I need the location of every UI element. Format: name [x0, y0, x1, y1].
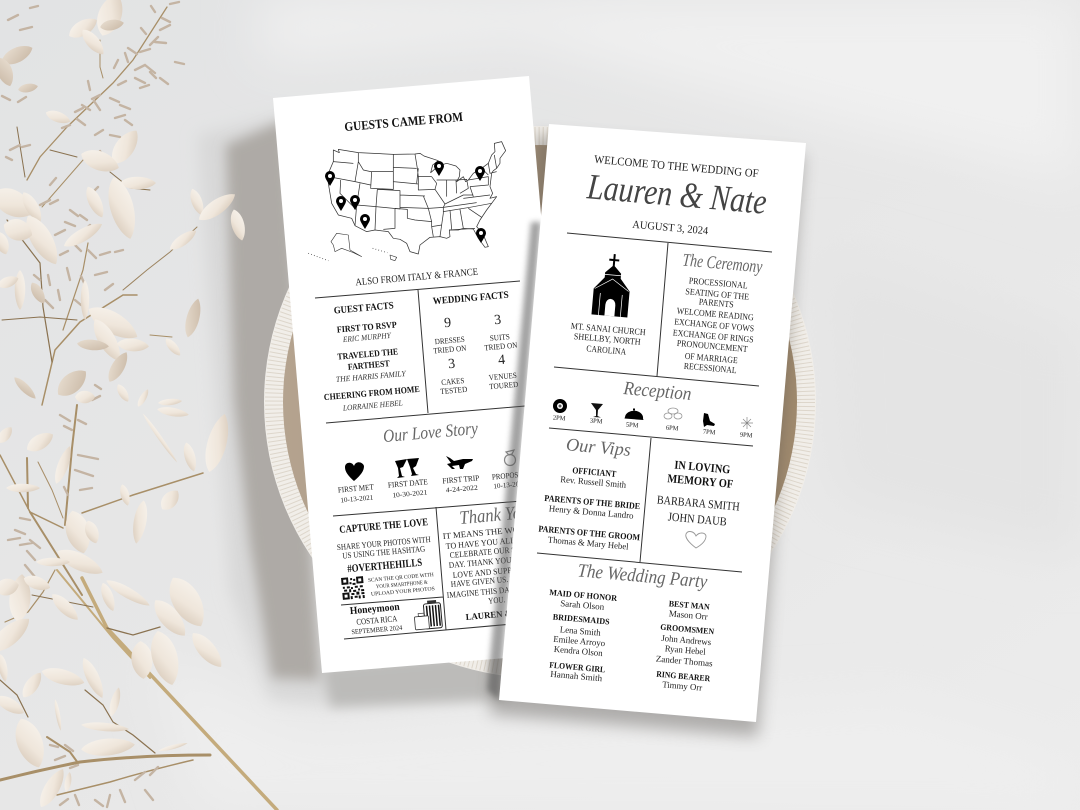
panel: the wedding party: MAID OF HONOR [549, 587, 618, 603]
panel: honeymoon [349, 600, 442, 636]
panel: honeymoon: COSTA RICA [356, 613, 398, 627]
icon: heart [345, 462, 364, 481]
icon: luggage [413, 600, 442, 630]
panel: in loving memory: IN LOVING [674, 458, 731, 476]
panel: guest facts: THE HARRIS FAMILY [336, 369, 408, 384]
panel: the wedding party: Zander Thomas [655, 654, 714, 669]
icon: bells [703, 413, 715, 427]
plant: dried branches and leaves [0, 0, 277, 810]
panel: our VIPs: Our Vips [565, 434, 632, 460]
panel: reception timeline [553, 378, 753, 440]
panel: our VIPs: PARENTS OF THE BRIDE [544, 493, 641, 511]
panel: the ceremony: EXCHANGE OF RINGS [672, 328, 754, 345]
panel: thank you: LAUREN & NATE [465, 606, 538, 622]
panel: wedding facts: TRIED ON [433, 344, 467, 355]
panel: in loving memory [656, 458, 741, 548]
panel: wedding facts: TOURED [489, 380, 519, 391]
shadow of left card on wall [198, 115, 505, 708]
panel: thank you: YOU. [488, 594, 506, 606]
text: also from Italy and France: ALSO FROM ITALY & FRANCE [355, 267, 479, 288]
panel: guest facts: TRAVELED THE [337, 346, 399, 362]
panel: reception timeline: 3PM [590, 417, 603, 426]
panel: the ceremony: RECESSIONAL [683, 361, 737, 375]
panel: thank you: DAY. THANK YOU FOR THE [448, 552, 545, 570]
panel: thank you: TO HAVE YOU ALL HERE [445, 533, 538, 551]
panel: reception timeline: 9PM [740, 431, 753, 440]
left card [273, 76, 579, 673]
panel: capture the love: YOUR SMARTPHONE & [376, 580, 429, 590]
panel: guest facts: GUEST FACTS [333, 300, 395, 317]
panel: reception timeline: Reception [622, 378, 692, 405]
icon: outline heart [686, 532, 706, 548]
icon: cloche [624, 408, 644, 420]
panel: wedding facts: WEDDING FACTS [432, 290, 510, 307]
panel: wedding facts: CAKES [441, 376, 465, 387]
panel: the wedding party: Mason Orr [668, 608, 708, 622]
icon: airplane [446, 456, 473, 469]
panel: in loving memory: MEMORY OF [667, 471, 734, 491]
panel: our love story: Our Love Story [382, 418, 479, 446]
panel: our love story: PROPOSAL [491, 469, 528, 482]
icon: camera [553, 399, 567, 413]
panel: our VIPs: Rev. Russell Smith [560, 474, 627, 490]
panel: reception timeline: 7PM [703, 428, 716, 437]
panel: in loving memory: JOHN DAUB [667, 509, 727, 529]
panel: thank you [442, 502, 551, 622]
panel: the ceremony: WELCOME READING [676, 306, 754, 322]
panel: wedding facts: VENUES [488, 371, 517, 382]
leaves [0, 0, 248, 810]
panel: church: CAROLINA [586, 343, 627, 357]
panel: the wedding party: Kendra Olson [553, 644, 604, 658]
panel: wedding facts: 3 [494, 313, 502, 328]
grass seeds [2, 2, 184, 807]
right card shadow [490, 135, 803, 737]
panel: thank you: Thank You [459, 502, 530, 529]
panel: the ceremony: PRONOUNCEMENT [676, 338, 748, 354]
title: guests came from: GUESTS CAME FROM [344, 109, 464, 134]
panel: thank you: IT MEANS THE WORLD [442, 523, 537, 541]
panel: the ceremony: OF MARRIAGE [684, 351, 739, 365]
panel: wedding facts [432, 290, 519, 396]
panel: the wedding party: Timmy Orr [662, 679, 703, 693]
panel: the wedding party: The Wedding Party [577, 560, 709, 593]
wooden plate [264, 126, 816, 678]
icon: cocktail glasses [395, 458, 419, 478]
panel: capture the love: UPLOAD YOUR PHOTOS [371, 586, 435, 598]
icon: fireworks [741, 417, 753, 429]
panel: capture the love: SHARE YOUR PHOTOS WITH [336, 534, 431, 552]
panel: reception timeline: 6PM [666, 424, 679, 433]
panel: the ceremony: EXCHANGE OF VOWS [674, 317, 755, 333]
panel: in loving memory: BARBARA SMITH [656, 492, 741, 514]
panel: our love story: FIRST DATE [387, 477, 428, 490]
panel: thank you: CELEBRATE OUR SPECIAL [449, 542, 542, 560]
panel: capture the love [336, 517, 435, 600]
panel: the wedding party: RING BEARER [656, 669, 711, 683]
panel: our love story: FIRST TRIP [442, 473, 480, 486]
panel: our love story: 10-13-2021 [340, 494, 374, 504]
panel: guest facts: CHEERING FROM HOME [323, 384, 420, 402]
right card [499, 124, 806, 722]
panel: the wedding party: Sarah Olson [560, 598, 605, 612]
panel: our VIPs: OFFICIANT [572, 465, 617, 479]
panel: our VIPs: Henry & Donna Landro [548, 503, 635, 521]
panel: the ceremony [672, 250, 763, 375]
panel: wedding facts: TESTED [440, 385, 468, 396]
panel: thank you: IMAGINE THIS DAY WITHOUT [446, 581, 551, 600]
panel: our love story: 10-30-2021 [392, 488, 428, 500]
panel: guest facts: LORRAINE HEBEL [342, 398, 404, 413]
panel: guest facts [323, 300, 420, 413]
panel: our VIPs: PARENTS OF THE GROOM [538, 524, 641, 542]
panel: honeymoon: Honeymoon [349, 602, 400, 617]
panel: capture the love: SCAN THE QR CODE WITH [368, 572, 434, 584]
panel: thank you: HAVE GIVEN US. WE CAN'T [450, 571, 546, 589]
panel: the wedding party: John Andrews [661, 633, 712, 647]
panel: the wedding party: Ryan Hebel [664, 643, 707, 657]
panel: the ceremony: SEATING OF THE [685, 286, 750, 302]
heading: welcome: WELCOME TO THE WEDDING OF [594, 154, 759, 180]
panel: the wedding party: Emilee Arroyo [553, 634, 606, 648]
panel: thank you: LOVE AND SUPPORT YOU [452, 562, 545, 580]
panel: the wedding party: BRIDESMAIDS [552, 612, 610, 626]
panel: wedding facts: 3 [448, 357, 456, 372]
shadow of right card on left card [487, 222, 541, 700]
panel: the wedding party: Lena Smith [559, 624, 602, 638]
panel: the wedding party [549, 560, 715, 693]
panel: our love story [337, 418, 528, 504]
panel: the ceremony: The Ceremony [682, 250, 763, 276]
stems [0, 7, 277, 810]
panel: church [570, 253, 646, 357]
panel: wedding facts: TRIED ON [484, 341, 518, 352]
panel: wedding facts: 9 [444, 316, 452, 331]
panel: our VIPs [538, 434, 641, 552]
panel: capture the love: #OVERTHEHILLS [347, 557, 423, 575]
panel: our VIPs: Thomas & Mary Hebel [547, 535, 630, 552]
panel: reception timeline: 5PM [626, 421, 639, 430]
panel: church: MT. SANAI CHURCH [570, 321, 646, 337]
icon: church [591, 253, 633, 317]
icon: martini [591, 403, 603, 418]
panel: the wedding party: Hannah Smith [550, 669, 603, 683]
panel: wedding facts: DRESSES [434, 335, 465, 346]
panel: reception timeline: 2PM [553, 414, 566, 423]
panel: the ceremony: PARENTS [698, 297, 734, 310]
panel: capture the love: CAPTURE THE LOVE [339, 517, 429, 536]
icon: QR code [341, 576, 365, 600]
panel: the ceremony: PROCESSIONAL [688, 275, 748, 291]
panel: honeymoon: SEPTEMBER 2024 [351, 624, 403, 636]
panel: wedding facts: SUITS [489, 332, 510, 343]
panel: the wedding party: FLOWER GIRL [549, 660, 606, 674]
panel: church: SHELLBY, NORTH [573, 331, 642, 347]
panel: our love story: FIRST MET [337, 482, 374, 495]
panel: our love story: 10-13-2022 [493, 480, 527, 490]
panel: the wedding party: GROOMSMEN [660, 622, 715, 636]
US map with location pins [308, 142, 506, 261]
panel: capture the love: US USING THE HASHTAG [342, 543, 426, 561]
icon: cake [664, 408, 682, 419]
date: AUGUST 3, 2024 [632, 219, 709, 237]
panel: guest facts: ERIC MURPHY [342, 331, 392, 344]
panel: the wedding party: BEST MAN [668, 598, 711, 612]
panel: guest facts: FIRST TO RSVP [336, 319, 398, 335]
panel: guest facts: FARTHEST [347, 358, 390, 372]
panel: wedding facts: 4 [498, 353, 506, 368]
title: couple names: Lauren & Nate [585, 166, 768, 222]
panel: our love story: 4-24-2022 [446, 484, 479, 494]
icon: ring [504, 450, 516, 466]
